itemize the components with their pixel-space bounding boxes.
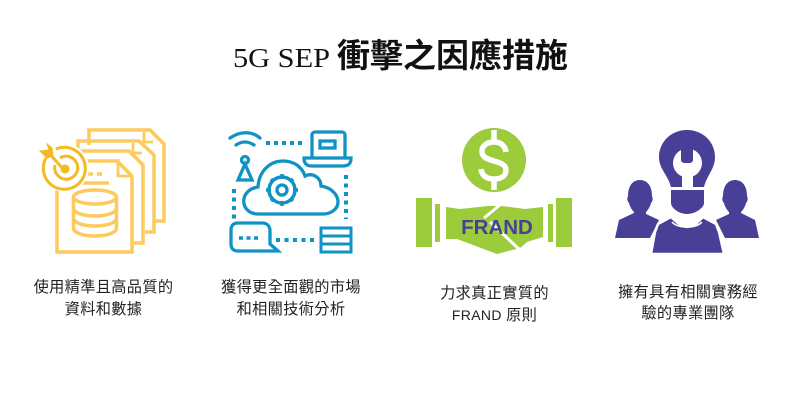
- label 4: [618, 283, 758, 322]
- title: [233, 37, 568, 74]
- left person: [615, 180, 659, 238]
- label 2: [221, 279, 361, 318]
- icon: FRAND handshake with dollar coin: [416, 128, 572, 254]
- label 1: 資料和數據: [65, 301, 142, 318]
- icon: documents with database and target: [40, 130, 164, 252]
- label 1: [34, 278, 173, 318]
- icon: cloud network: [230, 132, 351, 252]
- label 3: [440, 284, 549, 324]
- right person: [716, 180, 759, 238]
- label 3: FRAND 原則: [452, 307, 537, 324]
- central person shoulders: [651, 217, 724, 254]
- FRAND label: FRAND: [461, 216, 533, 239]
- title: 5G SEP: [233, 43, 330, 73]
- label 1: 使用精準且高品質的: [34, 278, 173, 296]
- label 2: 獲得更全面觀的市場: [221, 279, 361, 296]
- label 3: 力求真正實質的: [440, 284, 549, 302]
- label 4: 驗的專業團隊: [641, 305, 735, 322]
- title: 衝擊之因應措施: [337, 37, 568, 74]
- icon: team with lightbulb wrench: [615, 130, 759, 254]
- icon: target with arrow: [40, 144, 89, 192]
- icon: dollar coin: [462, 128, 526, 192]
- label 4: 擁有具有相關實務經: [618, 283, 758, 301]
- lightbulb with wrench: [659, 130, 715, 188]
- label 2: 和相關技術分析: [237, 301, 345, 318]
